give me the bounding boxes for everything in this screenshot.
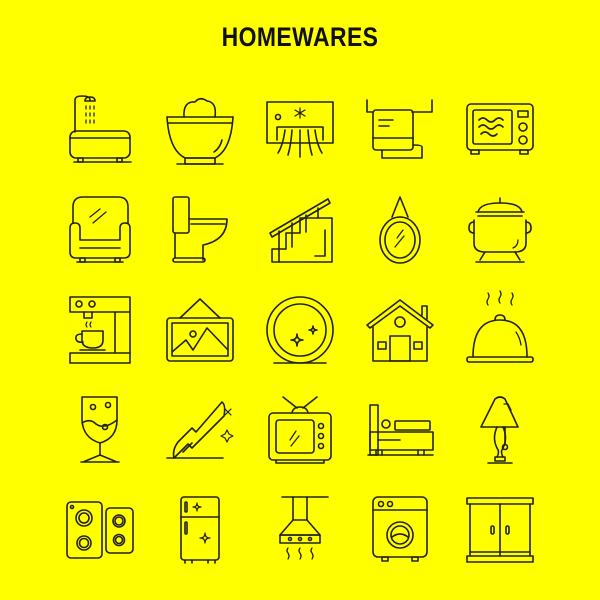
icon: speakers [67, 502, 133, 558]
icon: mirror [380, 197, 420, 263]
icon: toilet [173, 197, 227, 262]
icon: air conditioner [267, 102, 333, 157]
icon: microwave [467, 104, 533, 154]
icon: floor lamp [481, 397, 518, 463]
icon: picture frame [167, 299, 233, 361]
icon: bowl [167, 99, 233, 164]
icon: knife [167, 402, 233, 458]
icon: refrigerator [181, 497, 219, 563]
icon: food cloche [467, 291, 533, 362]
icon: cooking pot [469, 198, 531, 262]
icon: washing machine [373, 497, 427, 561]
icon: plate [267, 297, 333, 363]
icon: towel rack [367, 100, 432, 158]
icon: coffee machine [70, 297, 130, 363]
icon: house [367, 300, 433, 361]
icon: wardrobe [467, 498, 533, 562]
icon: television [269, 397, 331, 463]
icon: stairs [270, 199, 332, 262]
icon: bathtub [70, 96, 131, 162]
icon: range hood [280, 497, 328, 559]
icon: wine glass [81, 397, 119, 462]
title: HOMEWARES [222, 22, 378, 52]
icon: bed [368, 405, 433, 455]
icon: armchair [70, 197, 130, 262]
